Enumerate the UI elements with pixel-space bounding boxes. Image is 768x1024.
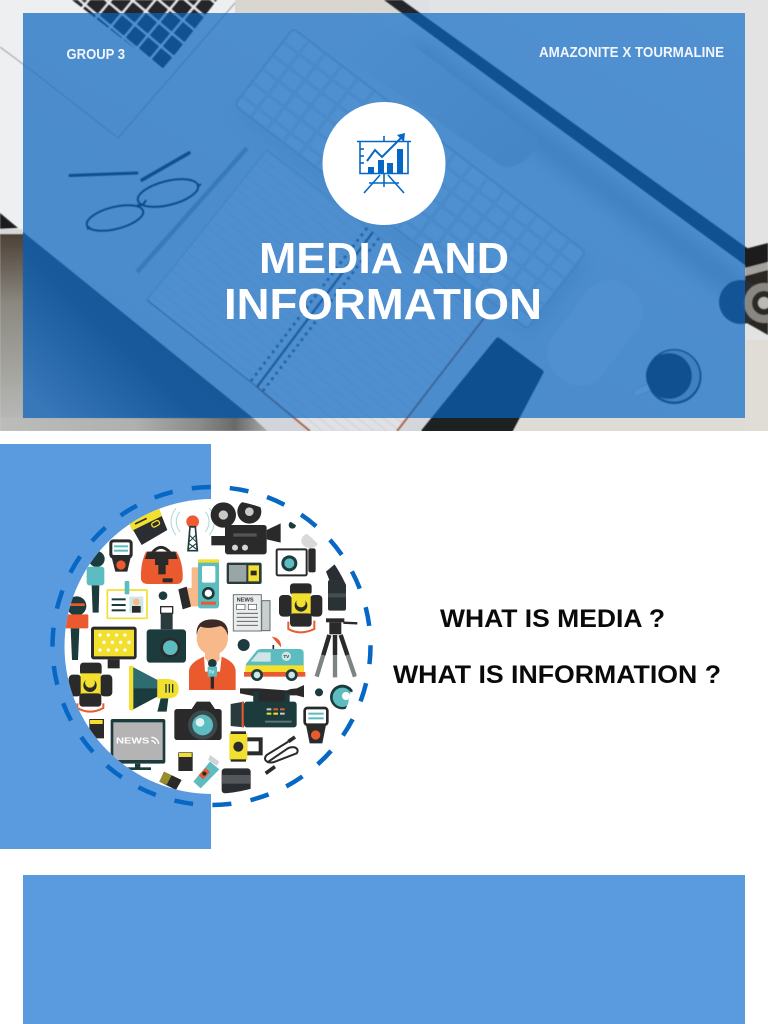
text: team label: AMAZONITE X TOURMALINE [539, 44, 724, 61]
icon: radio [227, 563, 262, 584]
panel: bottom blue block [23, 875, 745, 1024]
icon: lens cap [330, 685, 357, 709]
title: INFORMATION [224, 280, 542, 329]
icon: tripod [317, 618, 357, 677]
icon: camera with top flash [147, 607, 186, 663]
bottom strip of desk edge [0, 418, 267, 431]
left strip of desk edge [0, 234, 23, 431]
panel: blue cover overlay [23, 13, 745, 418]
notebook [259, 263, 482, 431]
monitor stand band [384, 0, 768, 282]
keyboard [234, 28, 586, 329]
icon: news reporter [189, 619, 236, 690]
icon: camcorder [231, 685, 304, 727]
soft shadow beneath monitor band [420, 48, 740, 288]
black corner of desk [0, 213, 18, 229]
phone [424, 340, 541, 431]
icon: second spotlight [69, 663, 112, 712]
panel: desk photo background [0, 0, 768, 431]
dot [315, 688, 323, 696]
icon: telephoto lens [326, 564, 346, 611]
notebook spine [251, 228, 379, 391]
icon: radio tower [171, 508, 214, 551]
icon: newspaper [233, 595, 270, 631]
panel: blue left block [0, 444, 211, 849]
icon: megaphone [129, 666, 179, 712]
illustration: media icons collage [65, 500, 357, 793]
text: group label: GROUP 3 [66, 46, 125, 63]
icon: USB stick [193, 755, 219, 788]
icon: lens ring [222, 768, 251, 793]
laptop keyboard [72, 0, 217, 70]
pencil [137, 148, 247, 272]
pen [70, 153, 189, 180]
title: MEDIA AND [259, 234, 509, 283]
icon: compact camera with flash [277, 533, 319, 575]
icon: DSLR camera [174, 702, 222, 740]
icon: film canister [229, 731, 263, 762]
lower-left desk wedge [0, 232, 267, 431]
icon: LED panel [91, 627, 137, 668]
mouse [537, 270, 653, 396]
icon: SD card bottom [178, 752, 193, 771]
icon: TV with NEWS screen [111, 719, 165, 770]
glasses [85, 178, 202, 232]
dot [159, 591, 167, 600]
icon: film camera [211, 500, 281, 554]
icon: SD card tilted [159, 772, 182, 790]
icon: TV van [244, 637, 305, 681]
icon: press ID card [107, 581, 147, 618]
icon: studio spotlight [279, 583, 322, 632]
dashed ring [35, 470, 388, 822]
heading: what is information: WHAT IS INFORMATION ? [393, 661, 721, 689]
icon: newspaper: NEWS [237, 597, 254, 603]
icon: presentation board in white circle [322, 102, 446, 225]
white circle backdrop [64, 499, 360, 794]
laptop edges [0, 3, 235, 138]
soft shadow under keyboard and mouse [240, 100, 590, 338]
icon: SD card left [89, 719, 104, 738]
icon: TV van: TV [283, 654, 290, 659]
icon: memory card [128, 507, 167, 545]
icon: camera bag [141, 547, 183, 584]
icon: flash unit [109, 539, 133, 572]
camera on right [745, 243, 768, 268]
heading: what is media: WHAT IS MEDIA ? [440, 605, 665, 633]
icon: orange microphone [65, 596, 88, 660]
icon: flash unit lower [303, 707, 329, 743]
icon: news reporter: TV [209, 669, 214, 674]
dot [238, 639, 250, 651]
monitor foot [372, 12, 514, 162]
dot [289, 521, 296, 529]
title [224, 234, 542, 329]
icon: TV with NEWS screen: NEWS [116, 735, 150, 745]
icon: teal handheld microphone [87, 551, 105, 613]
coffee cup [648, 384, 650, 390]
icon: voice recorder in hand [178, 559, 219, 609]
icon: USB cable [265, 737, 298, 773]
notebook orange edges [257, 387, 310, 431]
